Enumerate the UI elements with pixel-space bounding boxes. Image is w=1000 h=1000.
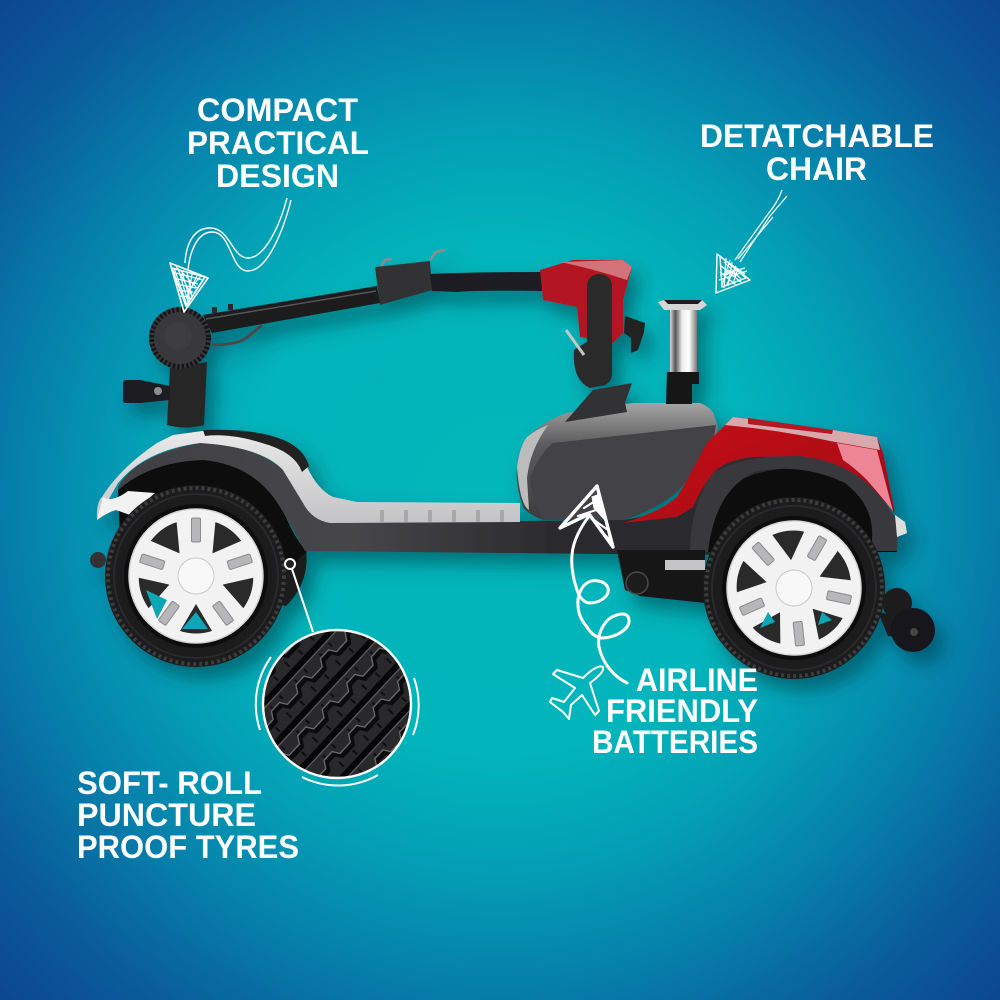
heading: compact practical design: COMPACT bbox=[197, 92, 358, 128]
heading: detachable chair: DETATCHABLE bbox=[700, 118, 934, 154]
tread arcs bbox=[256, 657, 419, 785]
key fob bbox=[624, 316, 645, 353]
rear tyre behind front wheel bbox=[260, 520, 307, 606]
red body bbox=[623, 417, 895, 523]
rear body underlay bbox=[620, 446, 897, 552]
tiller knob bbox=[123, 380, 170, 403]
heading: soft roll tyres: PUNCTURE bbox=[77, 797, 256, 833]
front wheel bbox=[105, 485, 287, 667]
tread circle bbox=[264, 631, 410, 777]
tread callout pointer bbox=[291, 566, 313, 632]
tiller column bbox=[167, 362, 207, 428]
heading: detachable chair bbox=[700, 118, 934, 187]
heading: compact practical design: DESIGN bbox=[216, 158, 339, 194]
heading: airline friendly batteries bbox=[592, 662, 758, 760]
battery box panel bbox=[530, 425, 716, 520]
heading: detachable chair: CHAIR bbox=[766, 151, 867, 187]
rear bumper bbox=[895, 515, 907, 537]
icon: airplane bbox=[550, 666, 603, 719]
arrow: detachable chair bbox=[716, 190, 787, 293]
heading: airline friendly batteries: BATTERIES bbox=[592, 724, 758, 760]
heading: soft roll tyres: PROOF TYRES bbox=[77, 829, 299, 865]
console handle bbox=[587, 274, 612, 386]
deck beam bbox=[118, 443, 897, 555]
heading: soft roll tyres: SOFT- ROLL bbox=[77, 765, 262, 801]
scooter illustration bbox=[90, 250, 935, 712]
heading: compact practical design: PRACTICAL bbox=[187, 125, 369, 161]
heading: compact practical design bbox=[187, 92, 369, 194]
red console bbox=[540, 260, 632, 343]
deck black trim bbox=[203, 430, 309, 472]
rear wheel bbox=[670, 464, 918, 712]
rear wheel arch bbox=[697, 468, 897, 552]
arrow: compact design bbox=[170, 198, 291, 312]
tiller cable bbox=[212, 325, 262, 345]
front nub bbox=[90, 552, 106, 568]
undercarriage bbox=[617, 550, 705, 603]
front bumper bbox=[97, 491, 155, 520]
deck ribs bbox=[380, 510, 504, 522]
anti-tip wheels bbox=[878, 588, 935, 652]
seat mount wedge bbox=[565, 383, 632, 422]
tiller clamp bbox=[375, 261, 432, 305]
rear fender outer bbox=[690, 455, 897, 552]
red body top bbox=[725, 417, 880, 450]
heading: airline friendly batteries: FRIENDLY bbox=[606, 693, 758, 729]
front silver deck bbox=[97, 431, 520, 523]
front fender wheel arch bbox=[118, 458, 307, 610]
tiller head bbox=[149, 307, 211, 369]
tiller tube bbox=[430, 272, 542, 292]
heading: soft roll tyres bbox=[77, 765, 299, 865]
red body highlight bbox=[837, 443, 893, 511]
box light edge bbox=[517, 425, 548, 510]
wheel gaps teal bbox=[146, 590, 832, 629]
tiller arm bbox=[203, 286, 380, 333]
battery box bbox=[517, 403, 718, 520]
heading: airline friendly batteries: AIRLINE bbox=[636, 662, 758, 698]
arrow: airline batteries bbox=[560, 486, 629, 683]
chrome seat post bbox=[670, 308, 697, 373]
tyre tread detail bbox=[256, 559, 419, 785]
